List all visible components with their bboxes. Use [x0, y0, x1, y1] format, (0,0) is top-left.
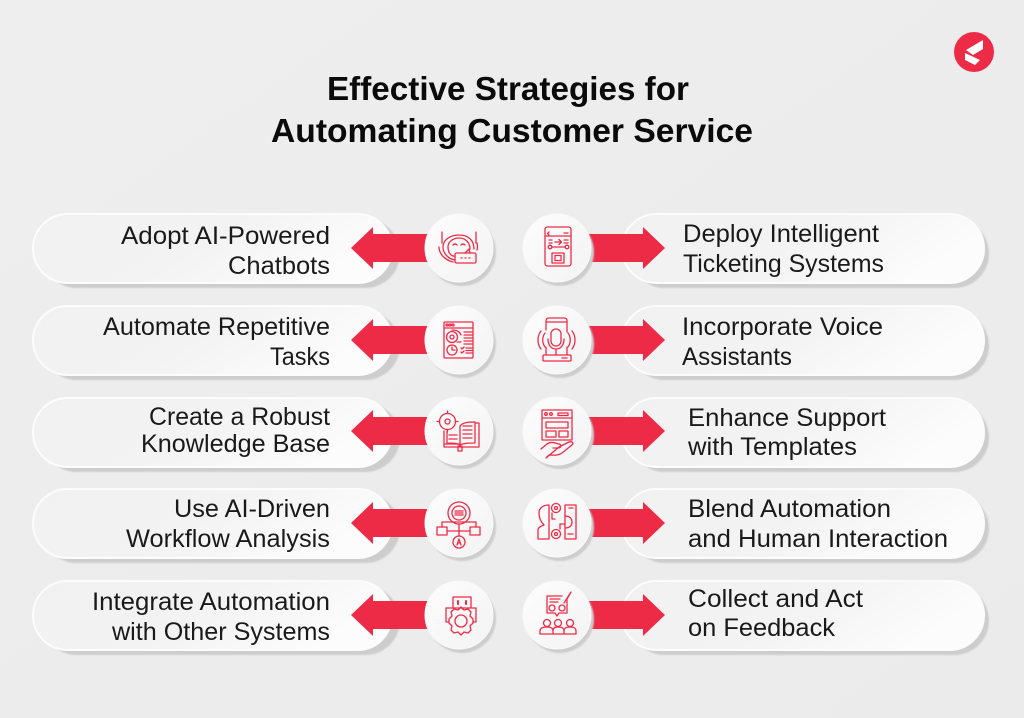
panel: Automate Repetitive Tasks: Automate Repetitive: [103, 313, 330, 341]
icon: integration gear: [446, 597, 476, 635]
icon: ticketing system: [545, 227, 571, 266]
icon: repetitive tasks: [444, 322, 473, 358]
panel: Enhance Support with Templates: with Templates: [687, 433, 857, 461]
panel: Collect and Act on Feedback: [523, 581, 989, 655]
panel: Blend Automation and Human Interaction: and Human Interaction: [688, 525, 948, 553]
panel: Incorporate Voice Assistants: Incorporate Voice: [682, 313, 883, 341]
panel: Collect and Act on Feedback: on Feedback: [688, 614, 836, 642]
icon: feedback: [540, 592, 576, 634]
panel: Blend Automation and Human Interaction: Blend Automation: [688, 495, 891, 523]
title: Effective Strategies for: [327, 70, 689, 107]
panel: Incorporate Voice Assistants: [523, 306, 989, 380]
panel: Use AI-Driven Workflow Analysis: [33, 489, 496, 563]
panel: Integrate Automation with Other Systems: [33, 581, 496, 655]
panel: Adopt AI-Powered Chatbots: Chatbots: [228, 252, 330, 280]
icon: voice assistant: [538, 318, 575, 361]
title: Automating Customer Service: [271, 112, 753, 149]
panel: Adopt AI-Powered Chatbots: [33, 214, 496, 288]
icon: knowledge base: [437, 411, 479, 451]
panel: Collect and Act on Feedback: Collect and Act: [688, 585, 863, 613]
panel: Integrate Automation with Other Systems: Integrate Automation: [92, 588, 330, 616]
title: [271, 70, 753, 149]
icon: templates in hand: [541, 410, 573, 458]
logo: [954, 32, 994, 72]
panel: Enhance Support with Templates: Enhance Support: [688, 404, 886, 432]
panel: Create a Robust Knowledge Base: [33, 397, 496, 472]
icon: human and robot: [538, 504, 576, 539]
panel: Incorporate Voice Assistants: Assistants: [682, 343, 792, 371]
panel: Blend Automation and Human Interaction: [523, 489, 989, 563]
panel: Enhance Support with Templates: [523, 397, 989, 472]
panel: Create a Robust Knowledge Base: Knowledge Base: [141, 430, 330, 458]
panel: Use AI-Driven Workflow Analysis: Use AI-Driven: [174, 495, 330, 523]
panel: Deploy Intelligent Ticketing Systems: Deploy Intelligent: [683, 220, 879, 248]
panel: Automate Repetitive Tasks: Tasks: [270, 343, 330, 371]
icon: chatbot: [439, 232, 478, 263]
panel: Deploy Intelligent Ticketing Systems: Ticketing Systems: [683, 250, 884, 278]
panel: Use AI-Driven Workflow Analysis: Workflow Analysis: [126, 525, 330, 553]
panel: Automate Repetitive Tasks: [33, 306, 496, 380]
panel: Deploy Intelligent Ticketing Systems: [523, 214, 989, 288]
icon: workflow analysis: [437, 502, 480, 548]
panel: Integrate Automation with Other Systems: with Other Systems: [111, 618, 330, 646]
panel: Create a Robust Knowledge Base: Create a Robust: [149, 403, 330, 431]
panel: Adopt AI-Powered Chatbots: Adopt AI-Powered: [121, 222, 330, 250]
